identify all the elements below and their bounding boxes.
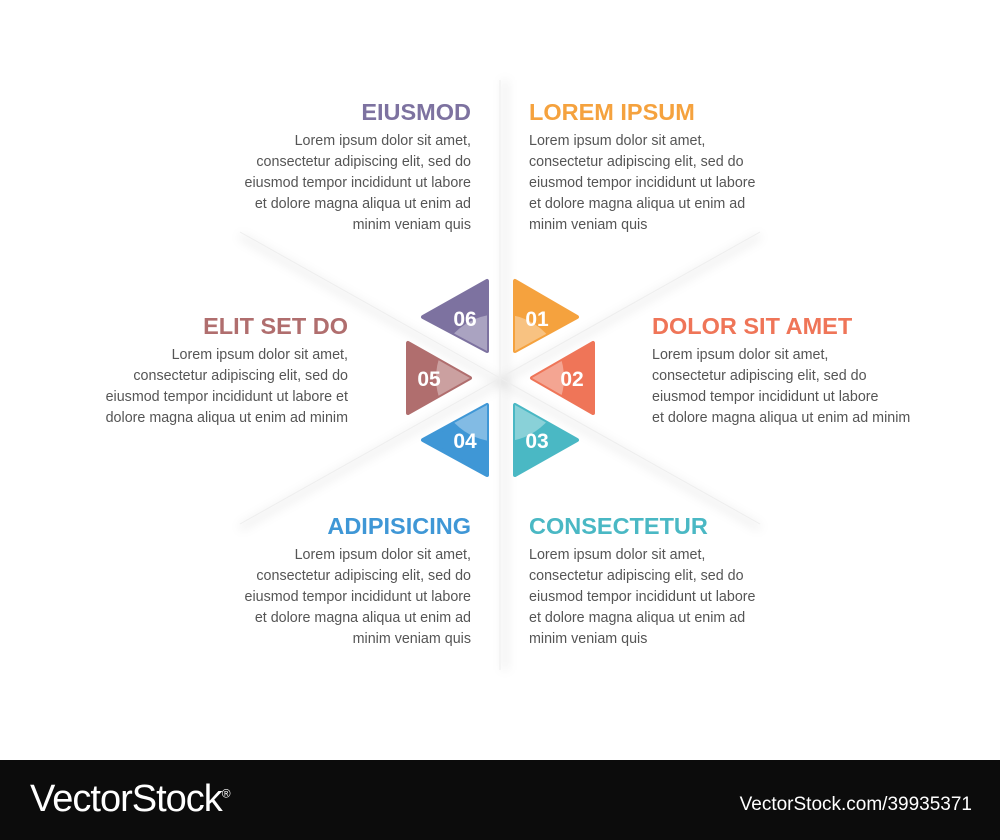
block 05	[106, 313, 348, 426]
triangle 01	[515, 281, 577, 351]
block 05: ELIT SET DO	[203, 313, 348, 339]
block 01: eiusmod tempor incididunt ut labore	[529, 175, 756, 191]
block 06: et dolore magna aliqua ut enim ad	[255, 196, 471, 212]
block 01	[529, 99, 756, 233]
block 05: dolore magna aliqua ut enim ad minim	[106, 410, 348, 426]
block 04: minim veniam quis	[353, 631, 471, 647]
block 06: eiusmod tempor incididunt ut labore	[244, 175, 471, 191]
triangle 04: 04	[453, 430, 477, 453]
block 01: minim veniam quis	[529, 217, 647, 233]
block 03: consectetur adipiscing elit, sed do	[529, 568, 744, 584]
block 06: EIUSMOD	[361, 99, 471, 125]
block 06: consectetur adipiscing elit, sed do	[256, 154, 471, 170]
triangle 06: 06	[453, 308, 477, 331]
block 05: eiusmod tempor incididunt ut labore et	[106, 389, 348, 405]
triangle 03	[515, 405, 577, 475]
block 02	[652, 313, 910, 426]
block 01: Lorem ipsum dolor sit amet,	[529, 133, 705, 149]
block 02: Lorem ipsum dolor sit amet,	[652, 347, 828, 363]
block 06	[244, 99, 471, 233]
block 06: minim veniam quis	[353, 217, 471, 233]
triangle 01: 01	[525, 308, 549, 331]
triangle 04	[423, 405, 487, 475]
block 04: consectetur adipiscing elit, sed do	[256, 568, 471, 584]
block 04: ADIPISICING	[327, 513, 471, 539]
triangle 03: 03	[525, 430, 549, 453]
block 01: et dolore magna aliqua ut enim ad	[529, 196, 745, 212]
block 02: eiusmod tempor incididunt ut labore	[652, 389, 878, 405]
background rays	[240, 80, 760, 670]
block 04: eiusmod tempor incididunt ut labore	[244, 589, 471, 605]
block 03: et dolore magna aliqua ut enim ad	[529, 610, 745, 626]
block 03: eiusmod tempor incididunt ut labore	[529, 589, 756, 605]
footer logo: VectorStock®	[30, 778, 230, 820]
block 01: LOREM IPSUM	[529, 99, 695, 125]
block 03: minim veniam quis	[529, 631, 647, 647]
block 04	[244, 513, 471, 647]
block 02: et dolore magna aliqua ut enim ad minim	[652, 410, 910, 426]
block 02: consectetur adipiscing elit, sed do	[652, 368, 867, 384]
footer bar	[0, 760, 1000, 840]
triangle 05: 05	[417, 368, 441, 391]
footer url: VectorStock.com/39935371	[740, 794, 972, 815]
block 03: CONSECTETUR	[529, 513, 708, 539]
triangle 02	[532, 343, 593, 413]
block 01: consectetur adipiscing elit, sed do	[529, 154, 744, 170]
triangle 02: 02	[560, 368, 584, 391]
block 03: Lorem ipsum dolor sit amet,	[529, 547, 705, 563]
block 02: DOLOR SIT AMET	[652, 313, 852, 339]
block 04: Lorem ipsum dolor sit amet,	[295, 547, 471, 563]
triangle 06	[423, 281, 487, 351]
hexagon of numbered triangles	[408, 281, 593, 475]
triangle 05	[408, 343, 470, 413]
block 05: consectetur adipiscing elit, sed do	[133, 368, 348, 384]
block 06: Lorem ipsum dolor sit amet,	[295, 133, 471, 149]
block 03	[529, 513, 756, 647]
block 05: Lorem ipsum dolor sit amet,	[172, 347, 348, 363]
block 04: et dolore magna aliqua ut enim ad	[255, 610, 471, 626]
